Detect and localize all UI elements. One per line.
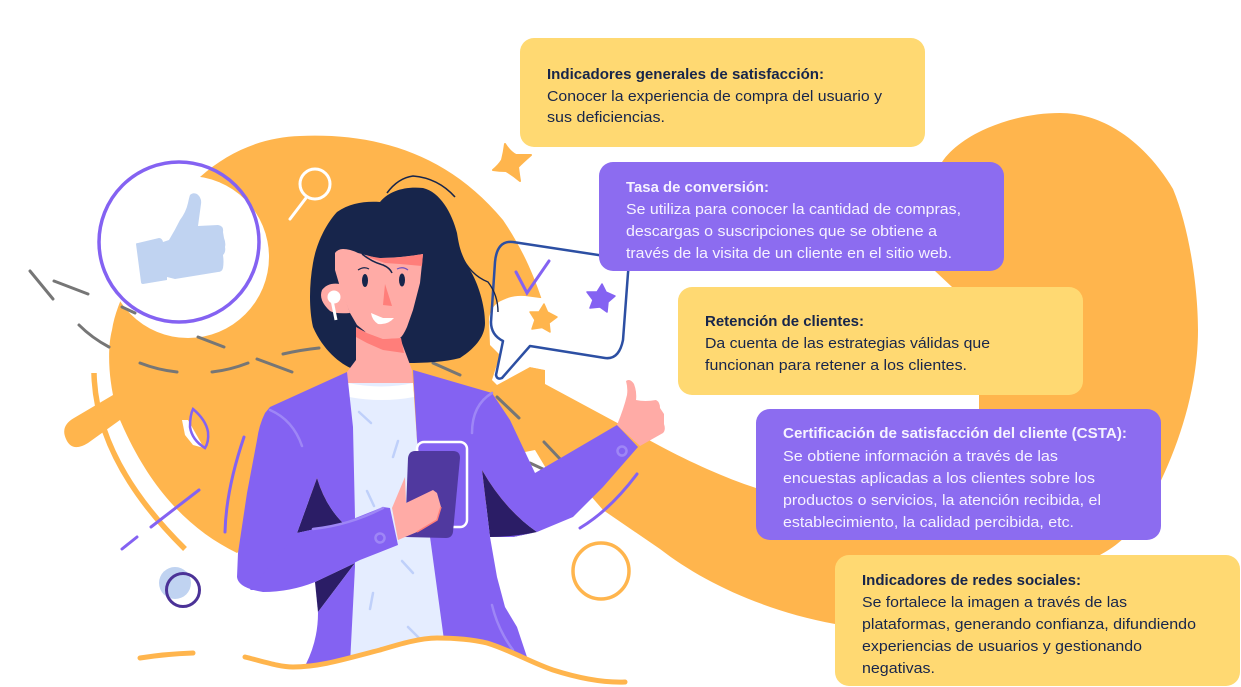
woman illustration: [237, 176, 665, 664]
jacket highlights: [270, 393, 626, 650]
holding hand: [392, 477, 441, 540]
orange arc: [94, 373, 185, 549]
neck: [347, 330, 414, 395]
earbud: [328, 290, 340, 320]
bubble outline: [491, 242, 628, 379]
dark ring: [166, 574, 200, 606]
card: retención de clientes: Retención de clientes:: [705, 313, 864, 330]
purple lines: [122, 437, 637, 549]
card: certificación CSTA: [756, 409, 1161, 540]
card: tasa de conversión: [599, 162, 1004, 271]
card: certificación CSTA: Se obtiene información a través de las: [783, 448, 1058, 465]
leaf: [182, 409, 208, 448]
card: tasa de conversión: través de la visita de un cliente en el sitio web.: [626, 245, 952, 262]
purple star: [587, 284, 615, 312]
thumb glyph: [136, 193, 225, 284]
white wedge under arm: [525, 450, 547, 475]
icon: magnifier: [290, 169, 330, 219]
card: redes sociales: Se fortalece la imagen a través de las: [862, 594, 1127, 611]
phone: [405, 451, 460, 538]
shirt dashes: [359, 412, 419, 638]
card: redes sociales: plataformas, generando confianza, difundiendo: [862, 616, 1196, 633]
blue dot: [159, 567, 191, 599]
white backing behind speech bubble: [489, 296, 640, 385]
card: redes sociales: [835, 555, 1240, 686]
ear: [321, 284, 350, 313]
white leaf: [182, 420, 204, 448]
card: retención de clientes: funcionan para retener a los clientes.: [705, 357, 967, 374]
white disc behind thumb: [107, 176, 269, 338]
card: indicadores generales: Conocer la experiencia de compra del usuario y: [547, 88, 883, 105]
card: certificación CSTA: establecimiento, la calidad percibida, etc.: [783, 514, 1074, 531]
jacket linings: [297, 470, 537, 612]
card: tasa de conversión: Se utiliza para conocer la cantidad de compras,: [626, 201, 961, 218]
orange background blob: [64, 113, 1198, 640]
card: indicadores generales: sus deficiencias.: [547, 109, 665, 126]
shirt: [348, 383, 445, 660]
speech bubble: [491, 242, 628, 379]
icon: orange star: [493, 144, 531, 181]
jacket left panel: [237, 372, 355, 664]
phone outline: [417, 442, 467, 527]
check mark: [516, 261, 549, 293]
side hair strand: [460, 253, 498, 312]
card: tasa de conversión: descargas o suscripciones que se obtiene a: [626, 223, 938, 240]
forehead shadow: [362, 254, 423, 266]
purple leaf outline: [190, 409, 208, 448]
white mask under wave: [245, 638, 625, 687]
hair strand on face: [362, 254, 392, 273]
card: retención de clientes: Da cuenta de las estrategias válidas que: [705, 335, 990, 352]
purple circle: [99, 162, 259, 322]
card: redes sociales: negativas.: [862, 660, 935, 677]
card: retención de clientes: [678, 287, 1083, 395]
card: indicadores generales: Indicadores generales de satisfacción:: [547, 66, 824, 83]
thumbs-up hand: [617, 380, 665, 446]
card: redes sociales: experiencias de usuarios y gestionando: [862, 638, 1142, 655]
neck shadow: [356, 327, 404, 353]
card: certificación CSTA: encuestas aplicadas a los clientes sobre los: [783, 470, 1095, 487]
hair: [310, 188, 485, 369]
orange star: [530, 304, 557, 332]
orange dash: [140, 653, 193, 658]
card: certificación CSTA: productos o servicios, la atención recibida, el: [783, 492, 1101, 509]
shirt collar: [348, 383, 414, 400]
card: indicadores generales: [520, 38, 925, 147]
left sleeve: [250, 507, 398, 590]
eyes: [362, 274, 405, 287]
top hair strand: [387, 176, 455, 197]
smile: [371, 313, 394, 324]
eyebrows: [358, 268, 408, 270]
card: redes sociales: Indicadores de redes sociales:: [862, 572, 1081, 589]
card: certificación CSTA: Certificación de satisfacción del cliente (CSTA):: [783, 425, 1127, 442]
face: [335, 249, 423, 339]
nose: [383, 284, 392, 306]
grey dashes: [30, 271, 561, 470]
jacket right panel: [413, 370, 638, 660]
orange wave line: [245, 638, 625, 682]
orange ring: [573, 543, 629, 599]
small circles: [159, 567, 200, 606]
card: tasa de conversión: Tasa de conversión:: [626, 179, 769, 196]
icon: thumbs up in circle: [99, 162, 259, 322]
